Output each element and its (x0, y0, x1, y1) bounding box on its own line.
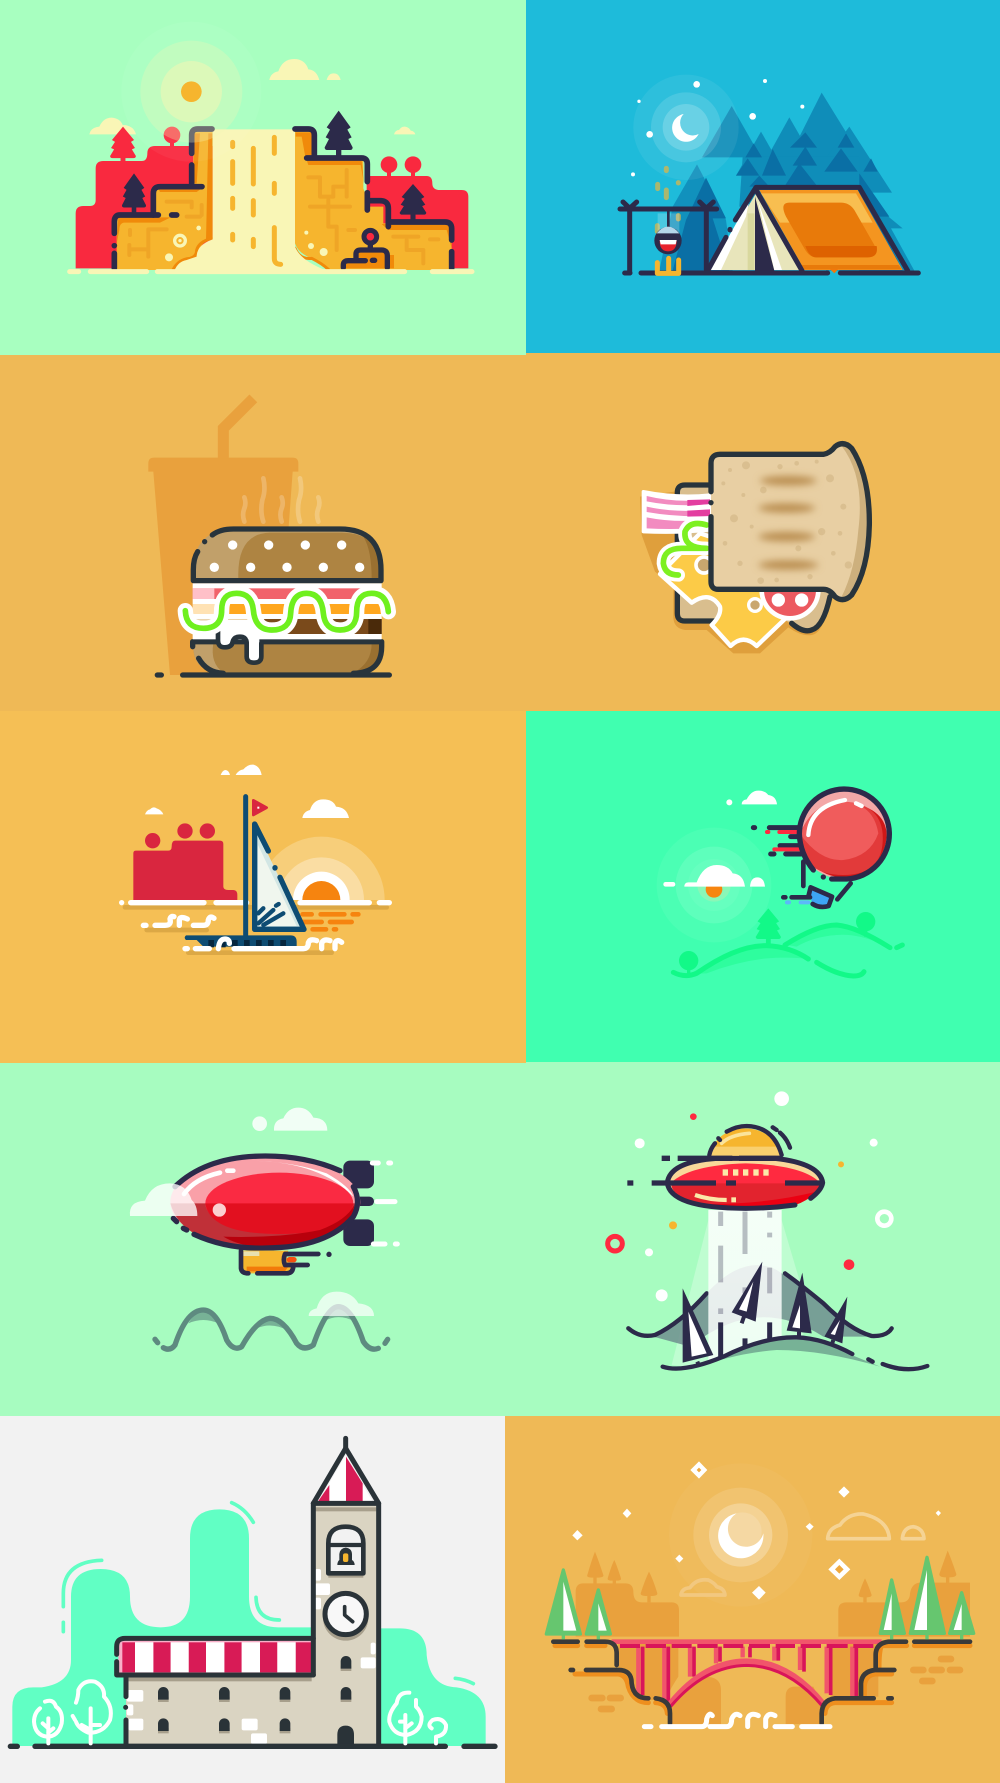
clouds (145, 765, 349, 818)
fire (657, 258, 679, 273)
sail (254, 824, 304, 929)
background land (576, 1551, 970, 1724)
speed dashes (372, 1163, 397, 1244)
hills (673, 925, 902, 976)
waves (143, 916, 342, 949)
tent body (759, 190, 903, 270)
dome (709, 1126, 790, 1157)
gondola (240, 1251, 332, 1273)
bridge deck (612, 1639, 882, 1644)
melted cheese drips (218, 620, 261, 663)
bell window (328, 1527, 363, 1578)
top bun (193, 529, 381, 581)
panel: burger (148, 398, 389, 675)
steam (243, 478, 319, 522)
setting sun (272, 836, 385, 900)
saucer details (695, 1169, 769, 1202)
sun with halos (657, 828, 771, 942)
wave hills (155, 1307, 388, 1349)
rock outcrop with knob (343, 230, 394, 268)
cooking pot (654, 210, 682, 254)
front hill (663, 1337, 927, 1370)
speed lines (627, 1158, 822, 1183)
red hills and trees (76, 127, 468, 268)
tripod (620, 202, 717, 273)
dark pine trees (122, 111, 426, 220)
floating dots (608, 1091, 891, 1301)
lower cloud (309, 1292, 374, 1316)
ground (10, 1738, 495, 1754)
speed lines (753, 828, 803, 854)
waves (644, 1714, 830, 1727)
panel: clock tower (10, 1438, 495, 1746)
panel: camping scene (620, 75, 918, 273)
brick dashes (592, 1659, 960, 1709)
moon halos and crescent (669, 1463, 812, 1607)
upper cloud (252, 1108, 327, 1131)
forest dark layer (673, 132, 903, 271)
windows (158, 1656, 354, 1745)
pebbles (165, 226, 328, 261)
ground line (625, 265, 918, 280)
stars (631, 79, 804, 176)
tent outline (708, 187, 908, 271)
ropes (803, 862, 851, 899)
balloon envelope (798, 789, 889, 879)
cliff outlines (553, 1642, 970, 1723)
accent arcs (63, 1503, 473, 1684)
awning (118, 1640, 313, 1681)
building walls (126, 1503, 378, 1745)
basket (783, 887, 833, 908)
top bread slice (711, 444, 869, 600)
right cliff (295, 132, 452, 270)
panel: sandwich (640, 444, 869, 653)
trees (679, 908, 875, 974)
pine trees (683, 1262, 847, 1367)
flag (253, 800, 267, 815)
water shadows (125, 907, 387, 953)
stars (572, 1461, 941, 1600)
drop shadows (640, 492, 830, 653)
drink cup silhouette (148, 398, 298, 675)
cheese holes (696, 557, 761, 611)
waterfall (173, 129, 325, 274)
panel: hot air balloon (657, 789, 902, 976)
forest light layer (659, 93, 914, 271)
clouds (89, 59, 415, 134)
bottom bun (193, 642, 382, 673)
horizon line (122, 895, 389, 911)
cliff outlines (114, 129, 452, 268)
sun reflection (303, 914, 358, 929)
sun with halos (121, 22, 261, 162)
green hills (12, 1509, 486, 1746)
back hill (628, 1265, 892, 1347)
moon halos and crescent (633, 75, 739, 180)
outlined clouds (681, 1514, 924, 1595)
beam core (708, 1210, 782, 1364)
sparks (657, 168, 678, 232)
bricks (127, 1569, 376, 1744)
envelope (170, 1156, 360, 1248)
left cliff (117, 132, 213, 270)
mayo squiggle (185, 593, 388, 630)
bridge arch (671, 1662, 822, 1706)
back bread slice (677, 485, 830, 631)
white trees (34, 1681, 446, 1743)
panel: waterfall scene (70, 22, 472, 274)
green pine trees (546, 1557, 974, 1639)
left cloud overlapping (130, 1183, 197, 1216)
tomato (762, 562, 818, 618)
red island (133, 823, 237, 900)
tent front (710, 193, 799, 271)
clouds (663, 791, 777, 887)
beam dashes (721, 1212, 770, 1357)
cheese slice (660, 533, 787, 646)
cliff shadows (555, 1646, 970, 1713)
ground line (157, 667, 389, 683)
lettuce squiggle (663, 523, 707, 575)
panel: UFO (608, 1091, 927, 1370)
bridge columns (620, 1646, 873, 1702)
saucer body (667, 1157, 823, 1208)
panel: bridge at night (546, 1461, 974, 1727)
mast (238, 797, 253, 937)
building outlines (117, 1438, 379, 1745)
ground bars (70, 264, 472, 279)
roof (315, 1455, 376, 1511)
panel: sailboat (122, 765, 389, 963)
clock (323, 1593, 368, 1641)
fins (340, 1161, 374, 1246)
tractor beam side glow (672, 1220, 803, 1366)
filling layers (193, 583, 382, 639)
bacon (643, 492, 710, 532)
hull (185, 935, 297, 947)
panel: airship (130, 1108, 397, 1349)
